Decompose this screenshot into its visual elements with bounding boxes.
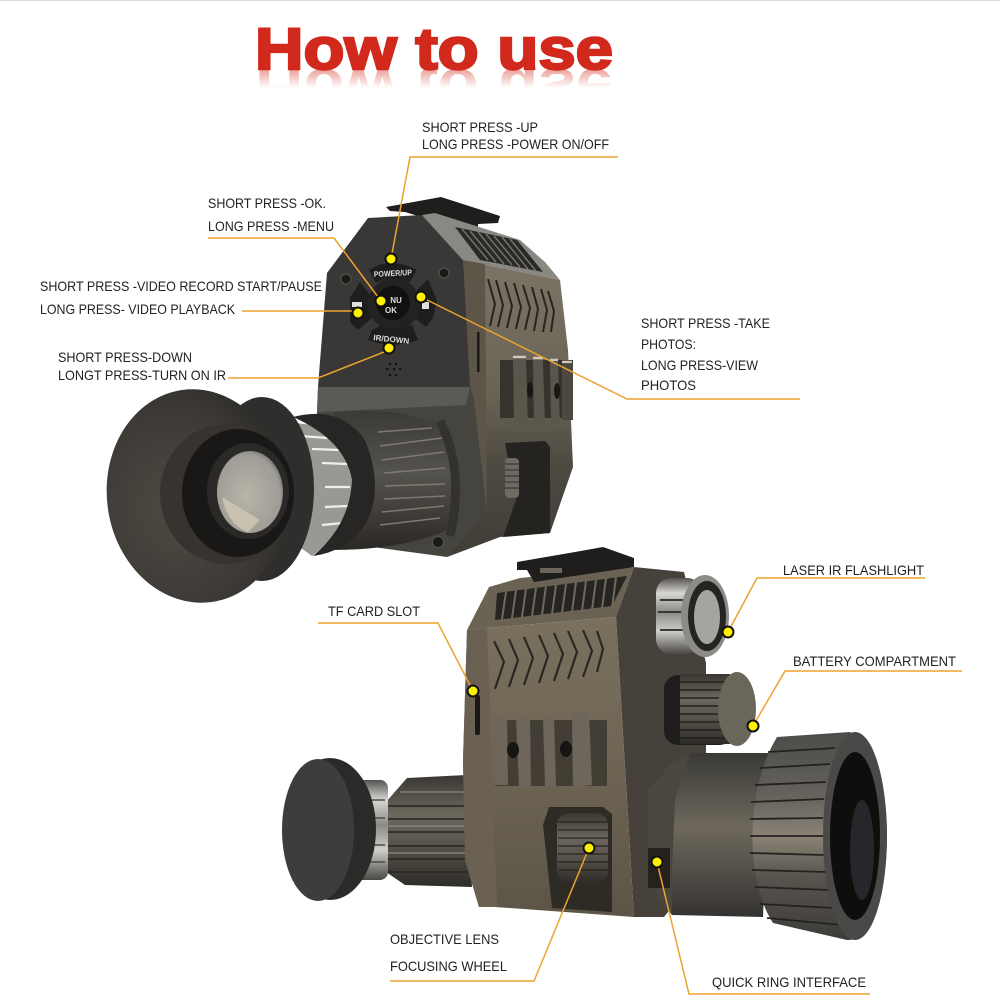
button: photo [412, 279, 437, 327]
title: How to use: How to use [255, 17, 613, 82]
side rail blocks [493, 712, 607, 787]
callout: battery compartment: BATTERY COMPARTMENT [793, 653, 956, 669]
chevron vents [494, 630, 603, 689]
top grille panel [422, 213, 560, 280]
side panel [447, 260, 573, 557]
callout: take photos: LONG PRESS-VIEW [641, 357, 759, 373]
button: MENU OK ring [368, 278, 420, 330]
callout: IR/down [58, 342, 394, 383]
callout: take photos: PHOTOS: [641, 336, 696, 352]
callout: take photos [416, 292, 800, 399]
button: POWER/UP: POWER/UP [374, 268, 413, 279]
battery cap knob [664, 672, 756, 746]
callout: take photos: PHOTOS [641, 377, 696, 393]
lower body [317, 387, 487, 557]
front control face [318, 215, 470, 387]
callout: objective lens focusing wheel: FOCUSING WHEEL [390, 958, 507, 974]
focus wheel notch [543, 807, 612, 912]
device: rear view night vision scope [93, 197, 573, 614]
device: front view night vision scope [282, 547, 887, 940]
button: IR/DOWN: IR/DOWN [373, 333, 410, 346]
callout: menu/ok [208, 195, 386, 306]
callout: quick ring interface: QUICK RING INTERFACE [712, 974, 866, 990]
callout: power/up: SHORT PRESS -UP [422, 119, 538, 135]
side notch and focus wheel [503, 441, 550, 537]
speaker holes [386, 363, 401, 376]
callout: laser IR flashlight [722, 562, 925, 638]
callout: battery compartment [748, 653, 962, 732]
callout: video record [40, 278, 364, 318]
button: IR/DOWN [368, 325, 418, 346]
quick ring block [648, 848, 670, 888]
objective lens front ring [750, 732, 887, 940]
callout: TF card slot: TF CARD SLOT [328, 603, 420, 619]
top grille [467, 567, 634, 630]
left knurled tube [386, 775, 472, 887]
screws [341, 268, 449, 284]
eyecup [282, 758, 376, 901]
objective lens barrel [648, 753, 770, 917]
front face [463, 617, 634, 917]
chrome focus ring [277, 421, 354, 556]
top rail [517, 547, 634, 582]
callout: IR/down: LONGT PRESS-TURN ON IR [58, 367, 226, 383]
callout: take photos: SHORT PRESS -TAKE [641, 315, 770, 331]
eyecup [93, 378, 314, 614]
callout: objective lens focusing wheel: OBJECTIVE LENS [390, 931, 499, 947]
side rail blocks [500, 357, 573, 425]
button: record [350, 282, 372, 330]
button: POWER/UP [369, 263, 417, 283]
objective tube [333, 411, 456, 550]
callout: laser IR flashlight: LASER IR FLASHLIGHT [783, 562, 924, 578]
eyepiece lens [217, 451, 283, 533]
callout: objective lens focusing wheel [390, 842, 594, 981]
TF card slot [475, 695, 480, 735]
button: MENU OK ring: NU [390, 296, 402, 305]
callout: power/up [386, 119, 618, 264]
laser flashlight [656, 575, 729, 657]
objective focusing wheel [557, 813, 608, 883]
chrome ring [346, 780, 388, 880]
right dark face [616, 567, 706, 917]
callout: IR/down: SHORT PRESS-DOWN [58, 349, 192, 365]
button: MENU OK ring: OK [385, 306, 397, 315]
callout: menu/ok: LONG PRESS -MENU [208, 218, 334, 234]
title: How to use: How to use [255, 56, 613, 121]
callout: menu/ok: SHORT PRESS -OK. [208, 195, 326, 211]
callout: quick ring interface [652, 856, 870, 994]
callout: power/up: LONG PRESS -POWER ON/OFF [422, 136, 609, 152]
callout: video record: LONG PRESS- VIDEO PLAYBACK [40, 301, 236, 317]
title: How to use [255, 17, 613, 121]
callout: TF card slot [318, 603, 478, 696]
top rail [386, 197, 500, 232]
dark collar [293, 414, 375, 556]
callout: video record: SHORT PRESS -VIDEO RECORD START/PAUSE [40, 278, 322, 294]
